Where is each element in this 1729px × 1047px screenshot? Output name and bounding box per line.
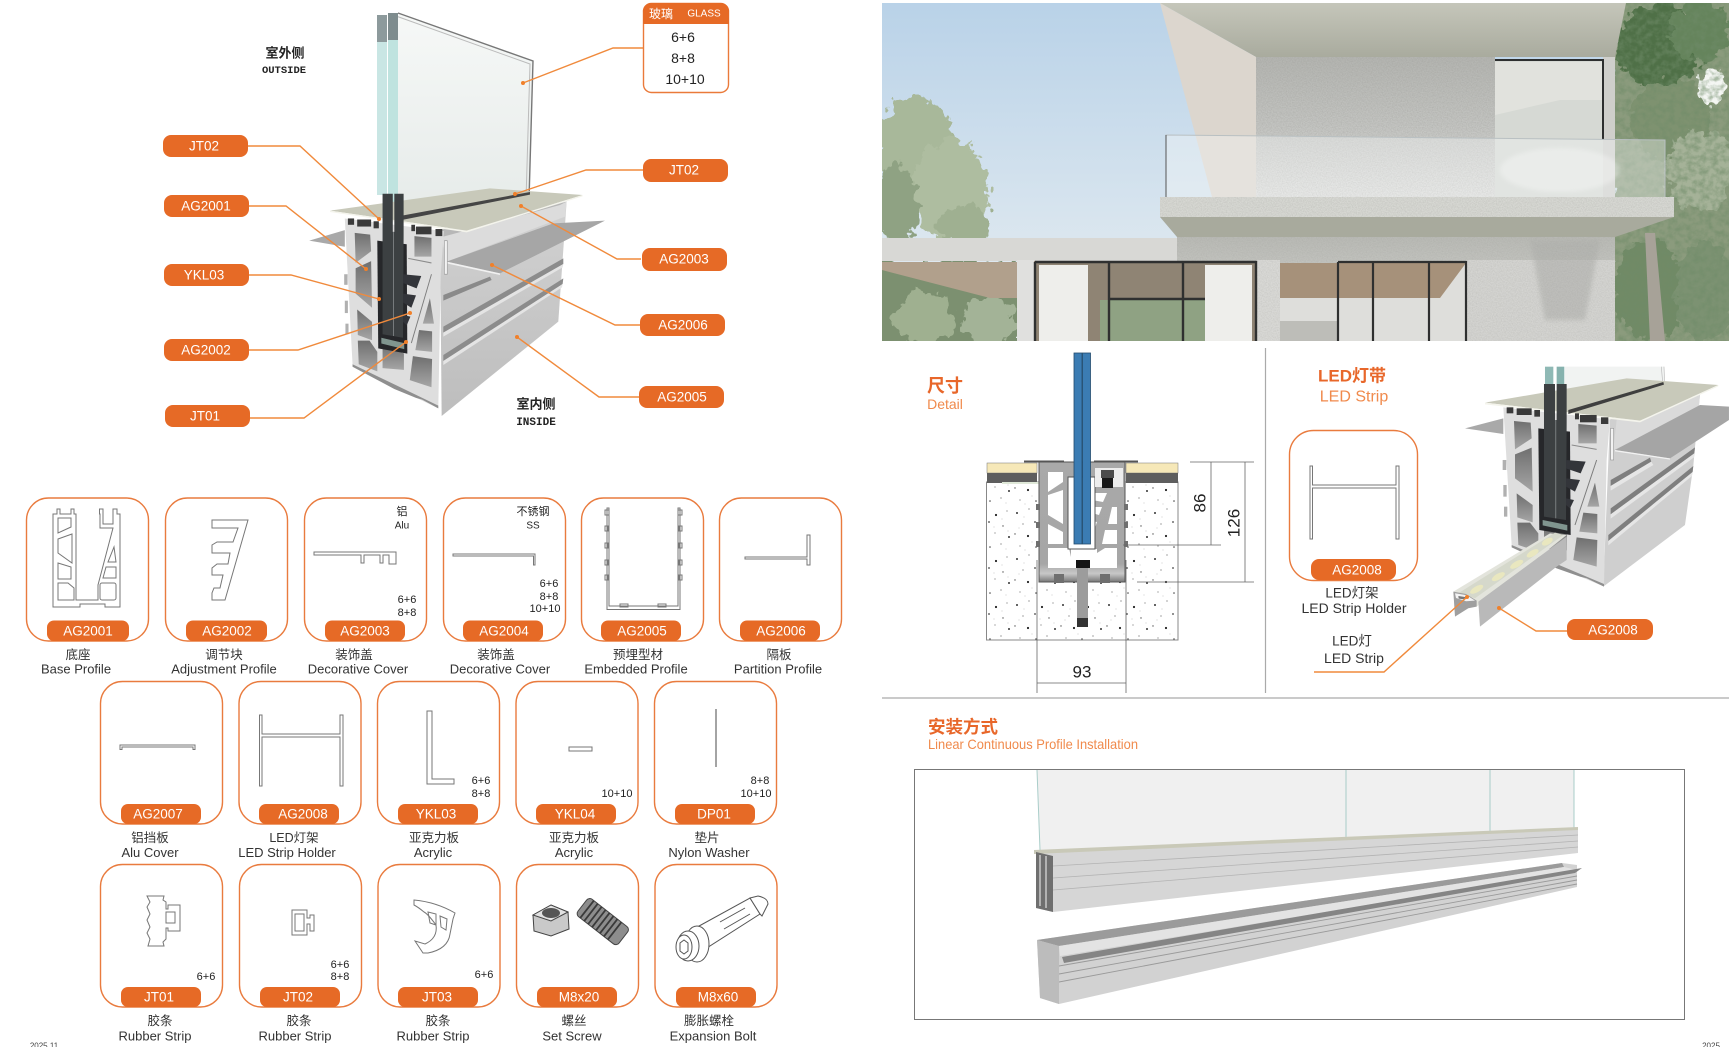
card: JT01 rubber strip [100, 864, 222, 1044]
caption [171, 648, 277, 676]
caption: 膨胀螺栓 [684, 1013, 734, 1028]
balcony slab [1160, 197, 1674, 237]
section heading: LED strip: LED灯带 [1318, 366, 1386, 386]
badge: AG2001 [47, 620, 129, 641]
section heading: installation: Linear Continuous Profile Installation [928, 736, 1138, 752]
badge: AG2004 [463, 620, 543, 641]
card: DP01 nylon washer [654, 682, 776, 860]
left tree foliage [882, 94, 1017, 341]
icon: AG2007 section [120, 745, 195, 750]
badge: AG2002: AG2002 [181, 342, 231, 358]
dimension: 86 [1123, 462, 1254, 545]
material and glass notes: 8+8 [540, 591, 558, 603]
glass notes: 8+8 [751, 775, 769, 787]
concrete substrate [986, 482, 1178, 640]
card: JT02 rubber strip [240, 864, 362, 1044]
heading: inside: 室内侧 [516, 396, 556, 412]
icon: nut and screw [533, 897, 630, 946]
panel: system assembly diagram [163, 3, 729, 429]
caption [734, 648, 822, 676]
badge: JT01: JT01 [144, 990, 174, 1004]
caption: Base Profile [41, 662, 111, 676]
caption [670, 1013, 757, 1044]
dimension: 86: 86 [1190, 494, 1210, 512]
badge: JT02 left: JT02 [189, 138, 219, 154]
caption: Acrylic [555, 845, 594, 860]
badge: JT01 [165, 405, 250, 427]
caption: 垫片 [694, 830, 720, 845]
dimension: 93: 93 [1073, 662, 1091, 682]
dimension: 93 [1037, 560, 1126, 693]
icon: AG2002 section [212, 520, 248, 600]
caption [259, 1013, 331, 1044]
dimension: 126: 126 [1224, 509, 1244, 537]
LED assembly view [1314, 367, 1729, 672]
badge: AG2008: AG2008 [278, 806, 328, 822]
upper assembled profile [1034, 827, 1578, 912]
badge: AG2008: AG2008 [1332, 562, 1382, 578]
caption: 胶条 [286, 1013, 312, 1028]
caption [121, 830, 179, 860]
badge: AG2001: AG2001 [63, 624, 113, 638]
badge: AG2005: AG2005 [617, 624, 667, 638]
glass panels [1037, 770, 1574, 850]
icon: AG2006 section [745, 535, 810, 565]
card: AG2002 adjustment profile [166, 498, 288, 676]
icon: expansion bolt [676, 896, 768, 962]
badge: AG2006 [740, 620, 820, 641]
icon: AG2001 section [53, 509, 120, 607]
badge: M8x60: M8x60 [698, 990, 738, 1004]
caption: 胶条 [147, 1013, 173, 1028]
badge: AG2008 [1311, 559, 1396, 580]
ground floor window left [1034, 261, 1256, 341]
glass notes: 6+6 [472, 775, 490, 787]
badge: M8x20: M8x20 [559, 990, 599, 1004]
glass notes: 8+8 [472, 788, 490, 800]
badge: JT02 right [643, 159, 728, 182]
caption: Nylon Washer [668, 845, 750, 860]
card: AG2005 embedded profile [582, 498, 704, 676]
LED channel [1453, 533, 1567, 627]
caption: LED Strip Holder [238, 845, 336, 860]
caption: 调节块 [205, 648, 243, 662]
badge: AG2006 [640, 314, 725, 336]
horizontal divider [882, 697, 1729, 699]
material and glass notes: 6+6 [398, 594, 416, 606]
caption: LED灯架 [269, 831, 319, 845]
caption: LED strip holder: LED灯架 [1325, 586, 1379, 600]
badge: AG2005: AG2005 [657, 390, 707, 404]
badge: AG2003 [325, 620, 405, 641]
badge: AG2003: AG2003 [340, 624, 390, 638]
glass notes: 6+6 [197, 971, 215, 983]
section heading: LED strip [1318, 366, 1388, 406]
leader lines [248, 48, 643, 418]
glass stub [1545, 366, 1665, 388]
caption [450, 648, 551, 676]
icon: AG2004 section [453, 554, 535, 565]
right tree foliage [1612, 0, 1729, 350]
caption: LED strip: LED Strip [1324, 650, 1384, 666]
glass notes [472, 775, 490, 800]
section heading: detail [927, 376, 963, 412]
glass notes [331, 959, 349, 983]
badge: JT03: JT03 [422, 990, 452, 1004]
expansion bolt [1076, 560, 1090, 627]
badge: AG2005 [601, 620, 681, 641]
badge: AG2002: AG2002 [202, 624, 252, 638]
caption [549, 831, 599, 860]
floor finish layers [987, 463, 1178, 484]
building lower storey [882, 237, 1615, 341]
icon: laminated glass panel [377, 13, 533, 215]
caption: LED strip holder [1301, 586, 1407, 616]
caption: 底座 [65, 647, 91, 662]
caption: Partition Profile [734, 662, 822, 676]
badge: AG2003 [642, 248, 727, 271]
badge: YKL04: YKL04 [555, 806, 596, 822]
profile cross-section [1024, 460, 1138, 583]
section heading: installation [928, 717, 1138, 752]
card: AG2001 base profile [26, 498, 148, 676]
heading: inside [516, 396, 556, 429]
tree trunk [1645, 233, 1665, 341]
material and glass notes: 铝 [396, 504, 408, 518]
material and glass notes: 8+8 [398, 607, 416, 619]
badge: M8x20 [537, 987, 617, 1007]
material and glass notes: SS [526, 520, 540, 532]
badge: AG2001: AG2001 [181, 198, 231, 214]
icon: YKL03 section [427, 711, 454, 784]
glass thickness callout: 8+8 [671, 50, 695, 66]
leader: AG2008 [1497, 606, 1567, 631]
caption: Rubber Strip [119, 1028, 191, 1044]
badge: YKL03: YKL03 [184, 268, 224, 282]
caption: LED strip holder: LED Strip Holder [1301, 600, 1407, 616]
top cover plate [1485, 378, 1718, 422]
card: AG2003 decorative cover [304, 498, 426, 676]
section heading: detail: Detail [927, 396, 963, 412]
heading: outside: 室外侧 [265, 46, 305, 60]
badge: DP01 [675, 804, 755, 824]
glass thickness callout: GLASS [687, 8, 721, 20]
card: AG2008 LED holder [1290, 430, 1418, 580]
caption: Set Screw [542, 1028, 602, 1044]
icon: DP01 section [715, 709, 717, 767]
caption: Adjustment Profile [171, 662, 277, 676]
icon: YKL04 section [569, 747, 592, 751]
badge: JT02: JT02 [283, 990, 313, 1004]
badge: AG2006: AG2006 [756, 624, 806, 638]
heading: inside: INSIDE [516, 417, 556, 429]
caption: 装饰盖 [477, 648, 515, 662]
caption: LED strip: LED灯 [1332, 634, 1372, 648]
card: YKL04 acrylic [516, 682, 638, 860]
caption: 胶条 [425, 1013, 451, 1028]
caption [308, 648, 409, 676]
badge: AG2001 [164, 195, 249, 217]
caption: Expansion Bolt [670, 1028, 757, 1044]
caption: 隔板 [766, 648, 792, 662]
section heading: installation: 安装方式 [928, 717, 998, 737]
glass notes: 10+10 [741, 788, 771, 800]
blue glass panes [1074, 353, 1090, 544]
glass notes [741, 775, 771, 800]
badge: AG2005 [639, 386, 724, 408]
glass thickness callout: 6+6 [671, 29, 695, 45]
building upper storey [1160, 3, 1665, 197]
caption: Decorative Cover [450, 662, 551, 676]
material and glass notes: Alu [395, 520, 409, 532]
icon: JT02 section [292, 910, 314, 935]
lower embedded profile [1037, 863, 1582, 1004]
section heading: detail: 尺寸 [927, 376, 963, 396]
material and glass notes: 10+10 [530, 603, 560, 615]
badge: JT02 right: JT02 [669, 162, 699, 178]
card: AG2008 LED strip holder [238, 682, 361, 860]
profile front section [1465, 384, 1614, 587]
glass notes: 8+8 [331, 971, 349, 983]
material and glass notes: 6+6 [540, 578, 558, 590]
badge: AG2008 [1567, 619, 1653, 640]
caption [238, 831, 336, 860]
badge: AG2008: AG2008 [1588, 622, 1638, 638]
dimension: 126 [1137, 462, 1254, 582]
badge: AG2002 [164, 339, 249, 361]
badge: AG2007 [121, 804, 201, 824]
icon: AG2005 section [605, 508, 682, 610]
badge: YKL03: YKL03 [416, 806, 456, 822]
card: AG2007 alu cover [100, 682, 222, 860]
caption: 亚克力板 [409, 831, 459, 845]
glass thickness callout [643, 3, 729, 92]
caption: Decorative Cover [308, 662, 409, 676]
caption: 预埋型材 [613, 648, 663, 662]
card: AG2004 decorative cover [444, 498, 566, 676]
badge: AG2004: AG2004 [479, 624, 529, 638]
caption: Acrylic [414, 845, 453, 860]
icon: JT03 section [414, 900, 455, 953]
material and glass notes [516, 505, 560, 615]
badge: AG2008 [259, 804, 339, 824]
badge: DP01: DP01 [697, 806, 731, 822]
icon: AG2003 section [314, 552, 396, 564]
caption: LED strip [1324, 634, 1384, 666]
photo: modern house with glass balcony [872, 0, 1729, 352]
section drawing with dimensions [986, 353, 1254, 693]
card: YKL03 acrylic [378, 682, 500, 860]
glass notes: 6+6 [475, 969, 493, 981]
badge: JT03 [398, 987, 478, 1007]
caption [584, 648, 688, 676]
caption [41, 647, 111, 676]
glass notes: 10+10 [602, 788, 632, 800]
caption: Embedded Profile [584, 662, 688, 676]
glass thickness callout: 10+10 [665, 71, 705, 87]
caption: Rubber Strip [259, 1028, 331, 1044]
badge: AG2003: AG2003 [659, 252, 709, 266]
section heading: LED strip: LED Strip [1320, 388, 1388, 406]
badge: JT01: JT01 [190, 408, 220, 424]
badge: AG2002 [186, 620, 267, 641]
badge: M8x60 [676, 987, 756, 1007]
badge: JT01 [121, 987, 201, 1007]
vertical divider [1264, 348, 1266, 693]
material and glass notes [395, 504, 416, 619]
glass notes: 6+6 [331, 959, 349, 971]
panel: installation view [914, 770, 1684, 1020]
caption: 铝挡板 [131, 830, 169, 845]
card: JT03 rubber strip [378, 864, 500, 1044]
ground floor window right [1280, 262, 1466, 341]
caption: 装饰盖 [335, 648, 373, 662]
card: M8x60 expansion bolt [655, 864, 777, 1044]
badge: AG2006: AG2006 [658, 318, 708, 332]
caption: Rubber Strip [397, 1028, 469, 1044]
card: AG2006 partition profile [720, 498, 842, 676]
caption [397, 1013, 469, 1044]
icon: AG2008 section [260, 715, 343, 786]
leader: LED strip [1314, 595, 1469, 672]
badge: YKL04 [536, 804, 616, 824]
heading: outside [262, 46, 306, 77]
glass thickness callout: 玻璃 [649, 7, 673, 21]
icon: AG2008 section [1310, 466, 1399, 539]
material and glass notes: 不锈钢 [516, 505, 550, 518]
caption [119, 1013, 191, 1044]
badge: JT02 [260, 987, 340, 1007]
badge: JT02 left [163, 135, 248, 157]
card: M8x20 set screw [516, 864, 638, 1044]
caption [542, 1014, 602, 1044]
caption [668, 830, 750, 860]
caption: 亚克力板 [549, 831, 599, 845]
caption: Alu Cover [121, 845, 179, 860]
icon: JT01 section [147, 896, 180, 946]
badge: YKL03 [398, 804, 478, 824]
caption [409, 831, 459, 860]
heading: outside: OUTSIDE [262, 65, 306, 77]
profile side face [1603, 395, 1729, 587]
icon: base profile 3D section [309, 188, 605, 416]
badge: AG2007: AG2007 [133, 806, 183, 822]
caption: 螺丝 [561, 1014, 587, 1028]
badge: YKL03 [164, 264, 249, 286]
